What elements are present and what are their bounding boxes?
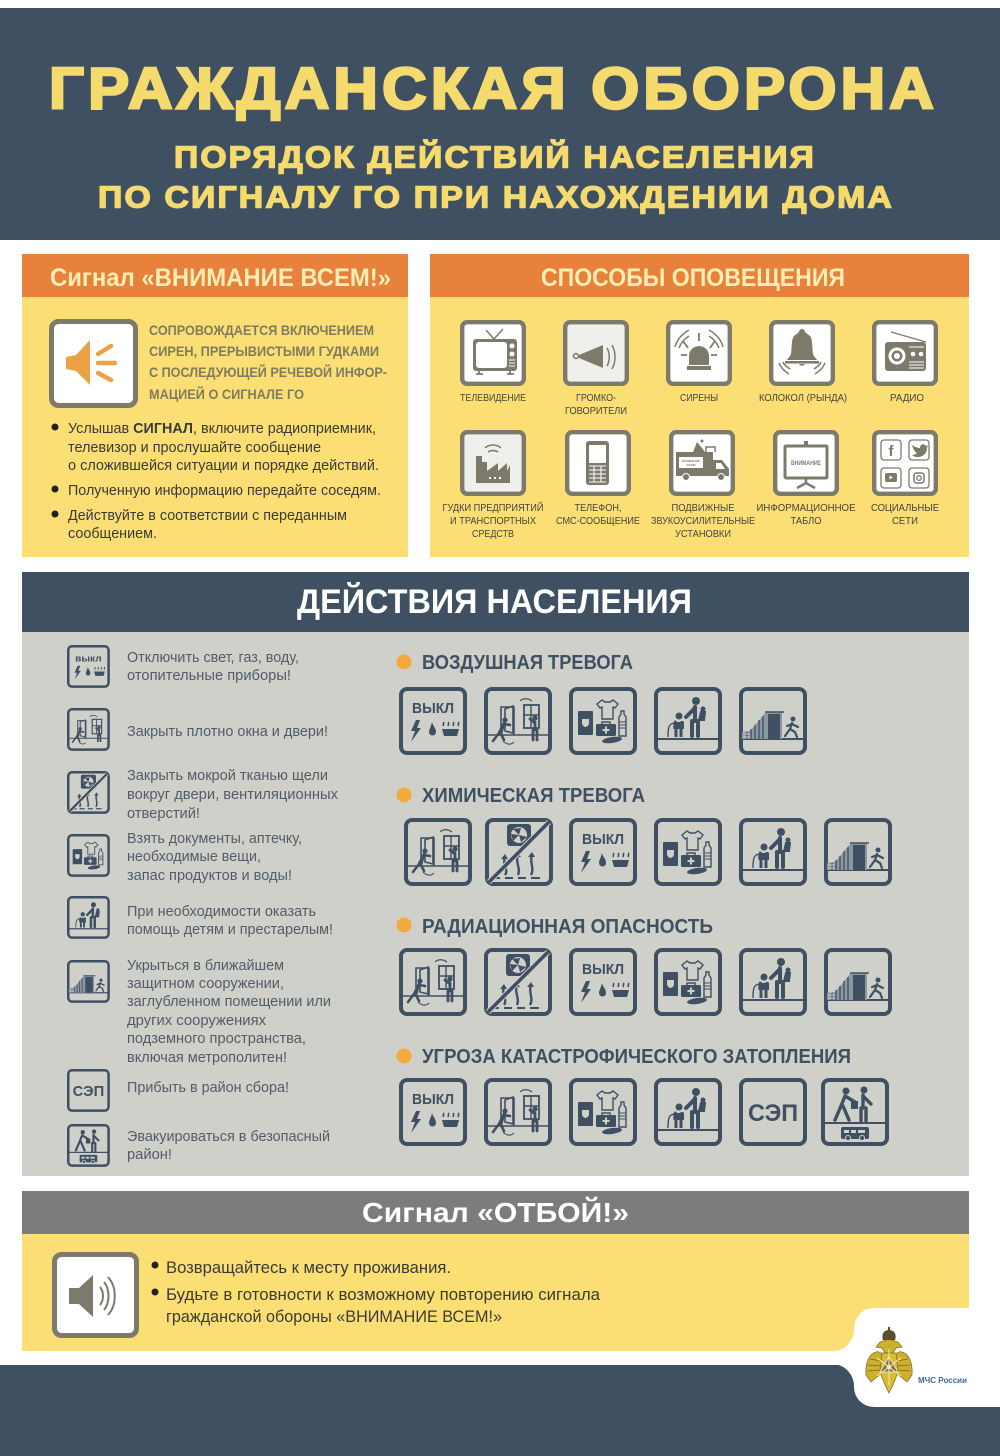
signal description: С ПОСЛЕДУЮЩЕЙ РЕЧЕВОЙ ИНФОР- <box>149 363 387 380</box>
right wing <box>894 1352 912 1382</box>
panel: notification methods <box>430 254 969 557</box>
icon legend: assembly point <box>68 1070 109 1111</box>
section: air raid alert <box>396 652 805 753</box>
icon legend: close windows and doors <box>68 709 109 750</box>
text: take shelter <box>127 957 331 1066</box>
panel heading: notification methods: СПОСОБЫ ОПОВЕЩЕНИЯ <box>541 264 845 292</box>
icon: radio <box>874 322 936 384</box>
icon legend: evacuate <box>68 1125 109 1166</box>
signal description <box>149 322 387 402</box>
icon: sound truck: ВСЕМ <box>687 463 696 467</box>
heads <box>876 1339 902 1353</box>
instructions list: Полученную информацию передайте соседям. <box>68 482 381 499</box>
icon: television <box>462 322 524 384</box>
icon: information board <box>775 432 837 494</box>
text: seal gaps <box>127 767 338 822</box>
instructions list: Действуйте в соответствии с переданным <box>68 507 347 524</box>
header band <box>0 8 1000 240</box>
text: evacuate: Эвакуироваться в безопасный <box>127 1128 330 1145</box>
text: seal gaps: Закрыть мокрой тканью щели <box>127 767 328 784</box>
left wing <box>866 1352 884 1382</box>
text: seal gaps: отверстий! <box>127 805 200 822</box>
section: catastrophic flood threat <box>396 1046 887 1144</box>
text: take shelter: других сооружениях <box>127 1012 266 1029</box>
label: information board: ТАБЛО <box>790 515 822 527</box>
text: supplies: Взять документы, аптечку, <box>127 830 302 847</box>
icon legend: supplies <box>68 835 109 876</box>
panel heading: attention signal <box>22 254 408 297</box>
section: air raid alert: ВОЗДУШНАЯ ТРЕВОГА <box>422 652 633 674</box>
label: radio: РАДИО <box>890 392 924 404</box>
all clear instructions: гражданской обороны «ВНИМАНИЕ ВСЕМ!» <box>166 1307 502 1326</box>
logo area <box>832 1308 1000 1407</box>
crown <box>882 1330 896 1340</box>
text: seal gaps: вокруг двери, вентиляционных <box>127 786 338 803</box>
label: factory horns: ГУДКИ ПРЕДПРИЯТИЙ <box>442 501 544 514</box>
icon: sound truck <box>671 432 733 494</box>
label: information board: ИНФОРМАЦИОННОЕ <box>756 502 856 514</box>
text: switch off: Отключить свет, газ, воду, <box>127 649 299 666</box>
text: supplies: необходимые вещи, <box>127 848 261 865</box>
instructions list: о сложившейся ситуации и порядке действий. <box>68 457 379 474</box>
label: sirens: СИРЕНЫ <box>680 392 718 404</box>
icon: bell <box>771 322 833 384</box>
all clear instructions: Будьте в готовности к возможному повторению сигнала <box>166 1285 601 1304</box>
label: sound trucks: УСТАНОВКИ <box>675 528 731 540</box>
text: take shelter: Укрыться в ближайшем <box>127 957 284 974</box>
label: social networks: СОЦИАЛЬНЫЕ <box>871 502 939 514</box>
body and tail <box>880 1353 898 1393</box>
text: help others <box>127 903 333 938</box>
footer band <box>0 1365 1000 1456</box>
label: sound trucks: ЗВУКОУСИЛИТЕЛЬНЫЕ <box>651 515 755 527</box>
text: close windows and doors: Закрыть плотно окна и двери! <box>127 723 328 740</box>
icon legend: take shelter <box>68 961 109 1002</box>
icon legend: seal gaps <box>68 772 109 813</box>
all clear instructions: Возвращайтесь к месту проживания. <box>166 1258 451 1277</box>
panel: signal attention <box>22 254 408 557</box>
section: radiation hazard: ВЫКЛ <box>582 961 624 978</box>
signal description: СИРЕН, ПРЕРЫВИСТЫМИ ГУДКАМИ <box>149 343 379 359</box>
label: social networks <box>871 502 939 527</box>
panel heading: notification methods <box>430 254 969 297</box>
text: switch off <box>127 649 299 684</box>
label: factory horns: И ТРАНСПОРТНЫХ <box>450 515 536 527</box>
label: social networks: СЕТИ <box>892 515 918 527</box>
section: chemical alert: ХИМИЧЕСКАЯ ТРЕВОГА <box>422 785 645 807</box>
label: loudspeakers: ГОВОРИТЕЛИ <box>565 405 627 417</box>
section: radiation hazard: РАДИАЦИОННАЯ ОПАСНОСТЬ <box>422 916 713 938</box>
text: take shelter: включая метрополитен! <box>127 1049 287 1066</box>
icon: siren <box>668 322 730 384</box>
icon legend: help others <box>68 897 109 938</box>
label: loudspeakers <box>565 392 627 417</box>
panel heading: all clear <box>22 1191 969 1234</box>
panel: population actions <box>22 572 969 1176</box>
label: factory horns: СРЕДСТВ <box>472 528 514 540</box>
icon: factory horns <box>462 432 524 494</box>
label: phone: СМС-СООБЩЕНИЕ <box>556 515 640 527</box>
text: take shelter: подземного пространства, <box>127 1030 306 1047</box>
section: catastrophic flood threat: ВЫКЛ <box>412 1091 454 1108</box>
icon: information board: ВНИМАНИЕ <box>791 460 822 467</box>
instructions list: сообщением. <box>68 525 157 542</box>
icon legend: switch off: выкл <box>75 653 102 664</box>
icon: sound truck: ВНИМАНИЕ <box>682 459 700 463</box>
signal description: МАЦИЕЙ О СИГНАЛЕ ГО <box>149 385 304 402</box>
text: supplies: запас продуктов и воды! <box>127 867 292 884</box>
all clear instructions <box>152 1258 601 1326</box>
subtitle: ПО СИГНАЛУ ГО ПРИ НАХОЖДЕНИИ ДОМА <box>98 180 894 214</box>
section: air raid alert: ВЫКЛ <box>412 700 454 717</box>
label: sound trucks <box>651 502 755 540</box>
signal description: СОПРОВОЖДАЕТСЯ ВКЛЮЧЕНИЕМ <box>149 322 374 338</box>
section: chemical alert: ВЫКЛ <box>582 831 624 848</box>
text: evacuate: район! <box>127 1146 172 1163</box>
label: sound trucks: ПОДВИЖНЫЕ <box>672 502 734 514</box>
logo caption: МЧС России <box>918 1376 967 1385</box>
icon legend: switch off <box>68 646 109 687</box>
label: phone <box>556 502 640 527</box>
text: help others: При необходимости оказать <box>127 903 316 920</box>
star triangle <box>880 1357 898 1372</box>
icon: speaker orange <box>52 322 136 406</box>
text: help others: помощь детям и престарелым! <box>127 921 333 938</box>
section: catastrophic flood threat: СЭП <box>748 1100 798 1127</box>
section: catastrophic flood threat: УГРОЗА КАТАСТРОФИЧЕСКОГО ЗАТОПЛЕНИЯ <box>422 1046 851 1068</box>
label: information board <box>756 502 856 527</box>
icon: mobile phone <box>567 432 629 494</box>
subtitle <box>98 138 894 214</box>
label: factory horns <box>442 501 544 540</box>
icon: speaker gray <box>54 1254 136 1336</box>
icon: social networks <box>874 432 936 494</box>
panel heading: population actions: ДЕЙСТВИЯ НАСЕЛЕНИЯ <box>297 582 692 621</box>
emblem <box>866 1327 912 1393</box>
title: ГРАЖДАНСКАЯ ОБОРОНА <box>49 56 938 122</box>
label: loudspeakers: ГРОМКО- <box>576 392 616 404</box>
icon legend: assembly point: СЭП <box>73 1083 104 1100</box>
icon: loudspeaker <box>565 322 627 384</box>
panel: all clear signal <box>22 1191 969 1351</box>
label: phone: ТЕЛЕФОН, <box>574 502 622 514</box>
section: chemical alert <box>396 785 890 884</box>
instructions list: Услышав СИГНАЛ, включите радиоприемник, <box>68 420 376 437</box>
instructions list: телевизор и прослушайте сообщение <box>68 439 321 456</box>
text: switch off: отопительные приборы! <box>127 667 291 684</box>
subtitle: ПОРЯДОК ДЕЙСТВИЙ НАСЕЛЕНИЯ <box>174 138 816 174</box>
text: supplies <box>127 830 302 884</box>
icon: social networks: f <box>888 443 894 460</box>
panel heading: all clear: Сигнал «ОТБОЙ!» <box>362 1196 629 1228</box>
text: take shelter: заглубленном помещении или <box>127 993 331 1010</box>
panel heading: population actions <box>22 572 969 632</box>
text: take shelter: защитном сооружении, <box>127 975 284 992</box>
panel heading: attention signal: Сигнал «ВНИМАНИЕ ВСЕМ!» <box>50 264 391 292</box>
text: evacuate <box>127 1128 330 1163</box>
text: assembly point: Прибыть в район сбора! <box>127 1079 289 1096</box>
label: bell: КОЛОКОЛ (РЫНДА) <box>759 392 847 404</box>
instructions list <box>52 420 381 542</box>
label: television: ТЕЛЕВИДЕНИЕ <box>460 392 526 404</box>
section: radiation hazard <box>396 916 890 1014</box>
